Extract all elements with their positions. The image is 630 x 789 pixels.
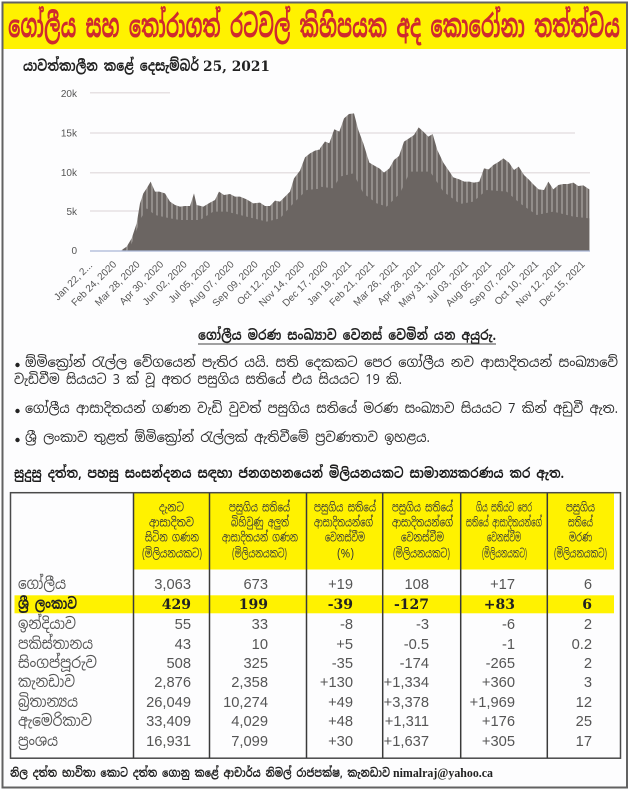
row: Sri Lanka highlighted: 429 [162, 597, 191, 613]
x axis date labels: Apr 30, 2020 [118, 259, 166, 308]
row: Sri Lanka highlighted: 6 [582, 597, 592, 613]
y axis labels: 5k [66, 207, 78, 218]
row: global: ගෝලීය [18, 573, 66, 594]
row: Pakistan: 0.2 [572, 637, 592, 653]
row: UK: 10,274 [223, 695, 268, 711]
row: Pakistan: -0.5 [404, 637, 429, 653]
column header 2: පසුගිය සතියේ [229, 500, 290, 516]
column header 1: ආසාදිතව [149, 514, 194, 530]
row: UK: 26,049 [146, 695, 191, 711]
row: Sri Lanka highlighted [18, 593, 592, 614]
row: Canada: කැනඩාව [18, 671, 75, 692]
row: Singapore: -174 [400, 656, 429, 672]
bullet points: ඕමික්‍රෝන් රැල්ල වේගයෙන් පැතිර යයි. සති දෙකකට පෙර ගෝලීය නව ආසාදිතයන් සංඛ්‍යාවේ [25, 353, 618, 371]
x axis date labels: Nov 14, 2020 [257, 259, 307, 309]
x axis date labels: Feb 24, 2020 [70, 259, 119, 309]
y axis labels: 15k [61, 128, 78, 140]
row: UK: +1,969 [470, 695, 515, 711]
x axis date labels: Nov 12, 2021 [514, 259, 564, 309]
row: Singapore: 2 [584, 656, 592, 672]
column header 5: (මිලියනයකට) [482, 546, 527, 562]
row: France [18, 730, 592, 751]
column header 3 [314, 500, 376, 562]
row: India: -3 [416, 617, 429, 633]
x axis date labels: Mar 28, 2020 [93, 259, 143, 309]
row: global: 3,063 [154, 577, 191, 593]
row: UK [18, 691, 592, 712]
row: Pakistan: +5 [336, 637, 353, 653]
column header 6 [554, 500, 607, 562]
row: Canada: +360 [482, 675, 515, 691]
update date line: 25, 2021 [203, 59, 270, 75]
column header 3: වෙනස්වීම [325, 530, 365, 546]
column header 5 [466, 500, 542, 562]
column header 6: මරණ [569, 530, 592, 546]
row: USA: +176 [482, 714, 515, 730]
bullet points: ශ්‍රී ලංකාව තුළත් ඕමික්‍රෝන් රැල්ලක් ඇතිවීමේ ප්‍රවණතාව ඉහළය. [25, 428, 430, 446]
row: France: +30 [328, 734, 353, 750]
row: Sri Lanka highlighted: +83 [484, 597, 515, 613]
row: USA: ඇමෙරිකාව [18, 710, 92, 731]
row: Canada: 2,876 [154, 675, 191, 691]
column header 3: ආසාදිතයන්ගේ [314, 514, 373, 530]
x axis date labels: May 31, 2021 [397, 259, 448, 310]
row: global: 673 [243, 577, 268, 593]
column header 4: (මිලියනයකට) [393, 546, 450, 562]
row: Sri Lanka highlighted: ශ්‍රී ලංකාව [18, 593, 77, 614]
row: Singapore: සිංගප්පූරුව [18, 652, 97, 673]
row: Pakistan: 43 [175, 637, 191, 653]
row: France: +305 [482, 734, 515, 750]
row: Singapore: -265 [486, 656, 515, 672]
column header 4: වෙනස්වීම [401, 530, 444, 546]
row: Singapore: -35 [332, 656, 353, 672]
column header 3: (%) [337, 546, 354, 562]
y axis labels: 20k [61, 89, 78, 100]
row: Pakistan: 10 [252, 637, 268, 653]
row: USA [18, 710, 592, 731]
bullet points: වැඩිවීම සියයට 3 ක් වූ අතර පසුගිය සතියේ එය සියයට 19 කි. [14, 370, 402, 388]
row: France: 17 [576, 734, 592, 750]
row: USA: 25 [576, 714, 592, 730]
row: Canada: 3 [584, 675, 592, 691]
column header 5: ගිය සතියට පෙර [476, 500, 532, 516]
row: France: +1,637 [384, 734, 429, 750]
x axis date labels: Oct 10, 2021 [493, 259, 541, 308]
row: UK: +3,378 [384, 695, 429, 711]
row: Singapore: 325 [243, 656, 268, 672]
column header 6: පසුගිය [566, 500, 595, 516]
row: global: +19 [328, 577, 353, 593]
row: UK: බ්‍රිතාන්‍යය [18, 691, 78, 712]
row: India: 33 [252, 617, 268, 633]
row: Sri Lanka highlighted: -127 [394, 597, 429, 613]
x axis date labels: Aug 07, 2020 [187, 259, 237, 309]
row: India [18, 613, 592, 634]
row: Singapore: 508 [166, 656, 191, 672]
x axis date labels: Jun 02, 2020 [141, 259, 190, 308]
x axis date labels: Sep 07, 2021 [468, 259, 518, 309]
row: USA: +48 [328, 714, 353, 730]
column header 1: (මිලියනයකට) [142, 546, 202, 562]
x axis date labels: Dec 15, 2021 [538, 259, 588, 309]
column header 2: ආසාදිතයන් ගණන [222, 530, 298, 546]
x axis date labels [52, 259, 588, 310]
row: France: ප්‍රංශය [18, 730, 58, 751]
column header 1: දැනට [159, 500, 184, 516]
row: USA: +1,311 [385, 714, 429, 730]
row: USA: 33,409 [146, 714, 191, 730]
row: Sri Lanka highlighted: 199 [239, 597, 268, 613]
bullet points [14, 353, 618, 446]
update date line: යාවත්කාලීන කළේ දෙසැම්බර් [23, 56, 199, 76]
row: global: 6 [584, 577, 592, 593]
row: UK: +49 [328, 695, 353, 711]
row: global: 108 [404, 577, 429, 593]
row: Canada: +130 [320, 675, 353, 691]
x axis date labels: Sep 09, 2020 [211, 259, 261, 309]
source credit footer: නිල දත්ත භාවිතා කොට දත්ත ගොනු කළේ ආචාර්ය නිමල් රාජපක්ෂ, කැනඩාව [10, 764, 390, 781]
x axis date labels: Apr 28, 2021 [376, 259, 424, 308]
column header 6: සතියේ [568, 514, 593, 530]
row: global: +17 [490, 577, 515, 593]
row: India: ඉන්දියාව [18, 613, 76, 634]
column header 3: පසුගිය සතියේ [314, 500, 376, 516]
row: France: 7,099 [231, 734, 268, 750]
source credit footer: nimalraj@yahoo.ca [393, 766, 494, 780]
row: Pakistan: -1 [502, 637, 515, 653]
row: India: -6 [502, 617, 515, 633]
row: Sri Lanka highlighted: -39 [328, 597, 353, 613]
x axis date labels: Dec 17, 2020 [281, 259, 331, 309]
y axis labels [61, 89, 78, 257]
row: USA: 4,029 [231, 714, 268, 730]
row: Pakistan: පකිස්තානය [18, 633, 93, 654]
x axis date labels: Jan 22, 2... [52, 260, 95, 303]
column header 4: ආසාදිතයන්ගේ [392, 514, 453, 530]
row: India: -8 [340, 617, 353, 633]
column header 4 [392, 500, 453, 562]
row: Pakistan [18, 633, 592, 654]
row: UK: 12 [576, 695, 592, 711]
column header 2 [222, 500, 298, 562]
y axis labels: 0 [71, 246, 77, 257]
row: Canada [18, 671, 592, 692]
column header 2: (මිලියනයකට) [232, 546, 287, 562]
y axis labels: 10k [61, 168, 78, 179]
x axis date labels: Aug 05, 2021 [444, 259, 494, 309]
row: Canada: 2,358 [231, 675, 268, 691]
column header 1 [142, 500, 202, 562]
row: global [18, 573, 592, 594]
x axis date labels: Jul 05, 2020 [167, 259, 213, 306]
row: France: 16,931 [146, 734, 191, 750]
column header 4: පසුගිය සතියේ [392, 500, 453, 516]
x axis date labels: Feb 21, 2021 [328, 259, 377, 309]
row: Canada: +1,334 [384, 675, 429, 691]
column header 2: බිහිවුණු අලුත් [231, 514, 289, 530]
data table [10, 493, 620, 758]
chart caption: ගෝලීය මරණ සංඛ්‍යාව වෙනස් වෙමින් යන අයුරු. [198, 326, 496, 345]
x axis date labels: Oct 12, 2020 [235, 259, 284, 308]
x axis date labels: Mar 26, 2021 [352, 259, 401, 309]
bar chart: daily global deaths [52, 89, 590, 310]
row: India: 55 [175, 617, 191, 633]
row: India: 2 [584, 617, 592, 633]
row: Singapore [18, 652, 592, 673]
column header 1: සිටින ගණන [145, 530, 199, 546]
x axis date labels: Jan 19, 2021 [305, 259, 354, 308]
x axis date labels: Jul 03, 2021 [425, 259, 471, 306]
column header 5: වෙනස්වීම [487, 530, 521, 546]
column header 5: සතියේ ආසාදිතයන්ගේ [466, 514, 542, 530]
